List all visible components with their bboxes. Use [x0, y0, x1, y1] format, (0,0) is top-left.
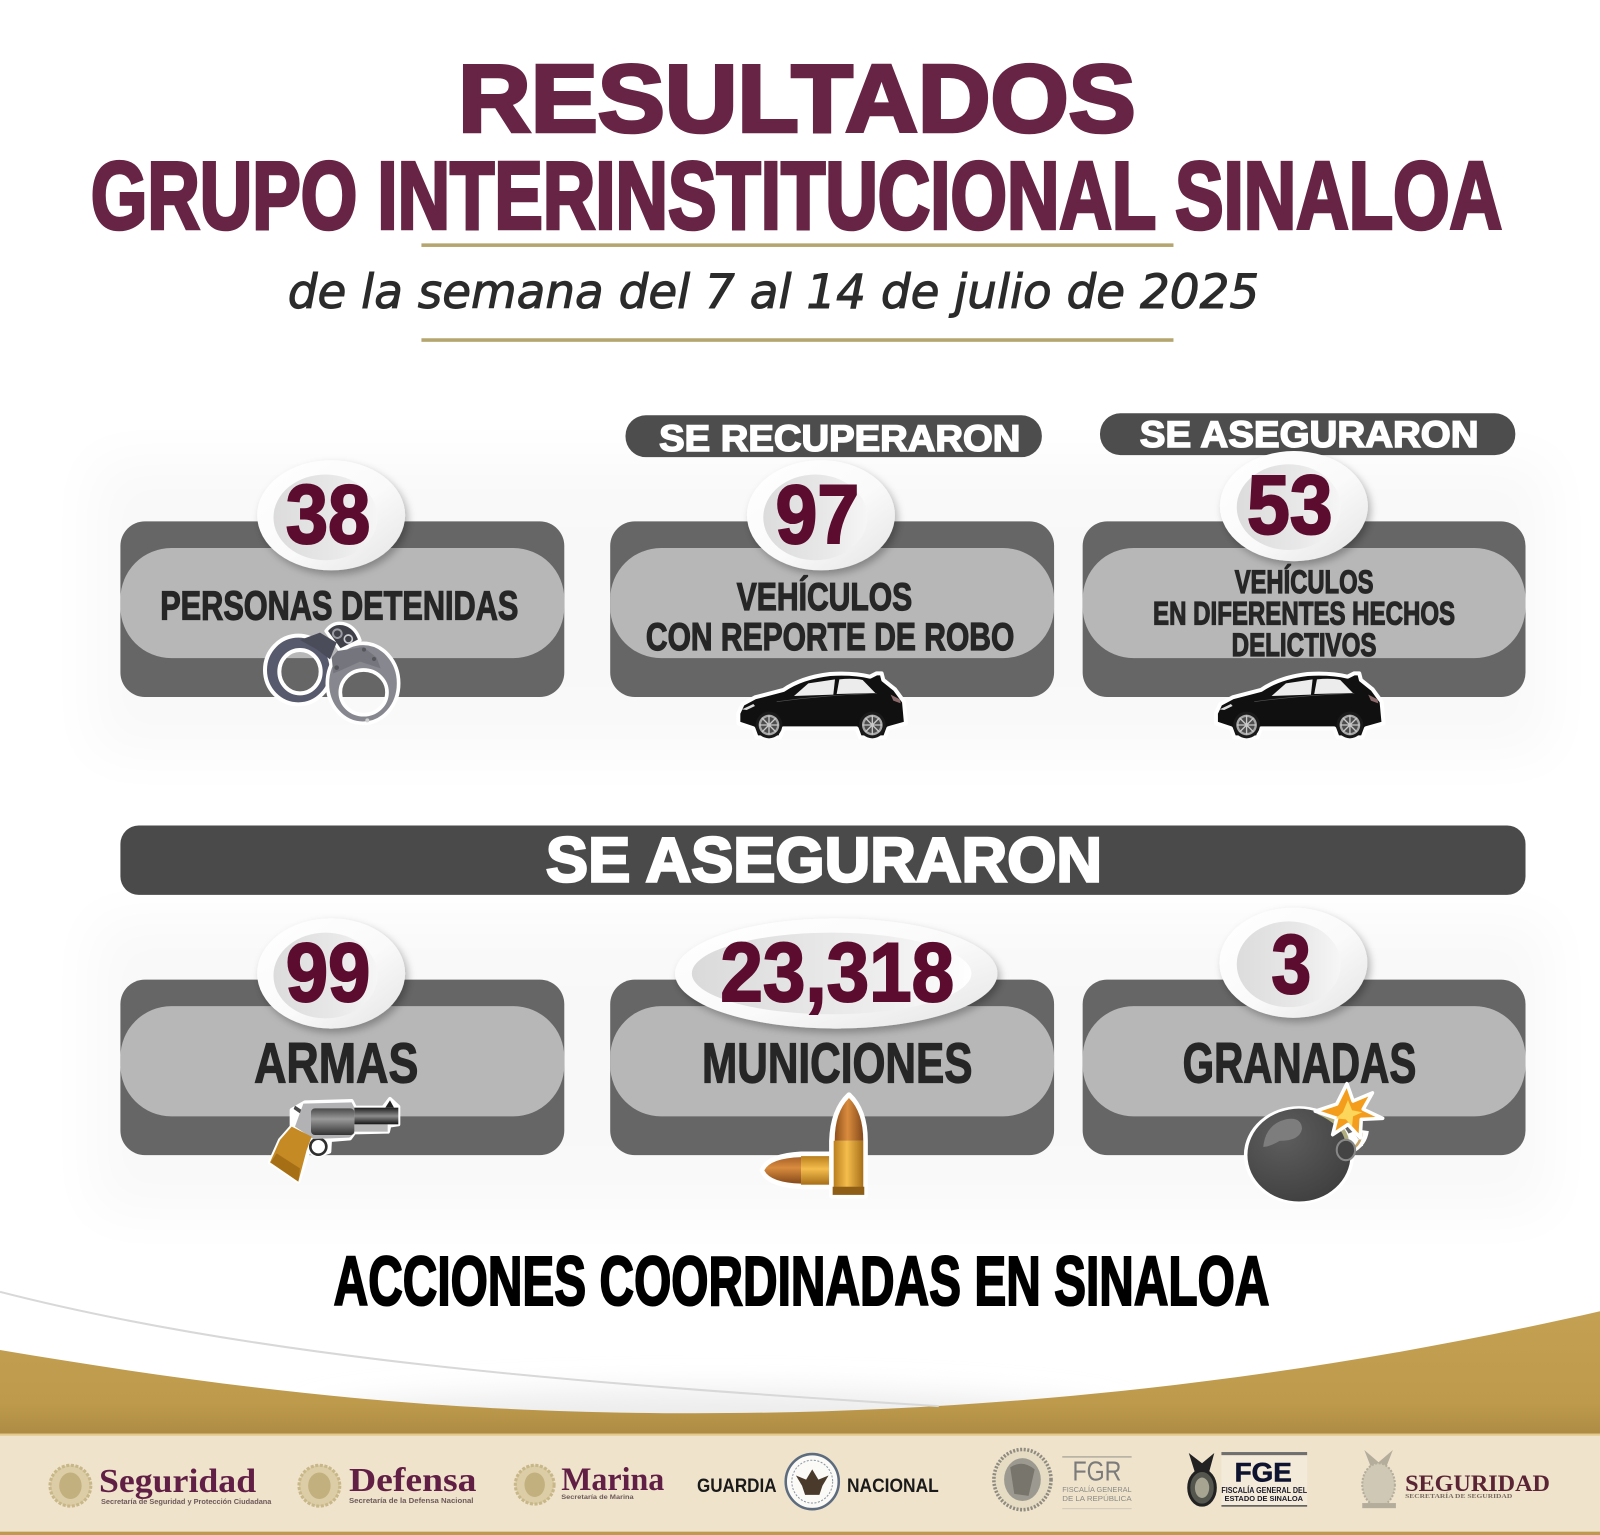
panel: granadas [1083, 908, 1526, 1204]
panel: armas [120, 918, 564, 1182]
badge: 97 [747, 460, 895, 570]
label: vehiculos: VEHÍCULOS [737, 575, 912, 619]
heading bar: SE ASEGURARON [120, 826, 1526, 896]
badge: 3: 3 [1271, 917, 1311, 1011]
logo: Seguridad: Seguridad [99, 1463, 256, 1500]
panel: vehiculos con reporte de robo [610, 460, 1054, 738]
label: personas detenidas: PERSONAS DETENIDAS [160, 582, 518, 628]
emblem [1362, 1450, 1396, 1508]
panel: vehiculos en diferentes hechos delictivos [1083, 451, 1526, 738]
label: delictivos: DELICTIVOS [1232, 626, 1377, 663]
icon: car [738, 673, 906, 738]
logo: Seguridad Sinaloa: SEGURIDAD [1405, 1471, 1550, 1497]
logo: Guardia Nacional: NACIONAL [847, 1475, 939, 1497]
footer wave: gold [0, 1292, 1600, 1451]
icon: bomb [1244, 1084, 1383, 1204]
label: en diferentes hechos: EN DIFERENTES HECHOS [1153, 594, 1455, 631]
badge: 53 [1220, 451, 1368, 561]
logo: FGR: FISCALÍA GENERAL [1062, 1485, 1132, 1494]
heading pill: SE ASEGURARON small: SE ASEGURARON [1140, 414, 1479, 455]
logo: FGE: FGE [1235, 1458, 1292, 1488]
logo: Defensa: Secretaría de la Defensa Nacional [349, 1497, 473, 1505]
badge: 97: 97 [776, 467, 859, 561]
emblem [994, 1449, 1051, 1510]
logo: Marina: Marina [561, 1462, 664, 1498]
logo: Guardia Nacional [697, 1454, 939, 1509]
footer band [0, 1434, 1600, 1532]
heading pill: SE RECUPERARON: SE RECUPERARON [659, 418, 1020, 459]
label: vehiculos: VEHÍCULOS [1235, 563, 1373, 600]
heading bar: SE ASEGURARON: SE ASEGURARON [546, 826, 1102, 896]
logo: FGE [1189, 1452, 1307, 1507]
icon: handcuffs [265, 623, 399, 723]
badge: 99: 99 [286, 925, 370, 1019]
title: RESULTADOS: RESULTADOS [458, 46, 1136, 153]
badge: 38 [257, 460, 405, 570]
subtitle with top and bottom rules: de la semana del 7 al 14 de julio de 2025 [288, 265, 1259, 320]
logo: Defensa [299, 1462, 477, 1506]
panel: municiones [610, 918, 1054, 1196]
badge: 99 [257, 918, 405, 1029]
badge: 53: 53 [1247, 458, 1333, 552]
label: municiones: MUNICIONES [702, 1032, 972, 1095]
emblem [50, 1465, 91, 1506]
badge: 23,318 [675, 918, 997, 1029]
label: granadas: GRANADAS [1183, 1032, 1416, 1095]
logo: Seguridad [50, 1463, 272, 1506]
logo: Seguridad Sinaloa: SECRETARÍA DE SEGURIDAD [1405, 1492, 1513, 1500]
badge: 38: 38 [286, 467, 370, 561]
icon: bullets [762, 1095, 865, 1196]
emblem [1189, 1453, 1215, 1505]
badge: 23,318: 23,318 [720, 925, 954, 1019]
logo: FGR [994, 1449, 1132, 1510]
logo: Defensa: Defensa [349, 1462, 477, 1499]
logo: Seguridad Sinaloa [1362, 1450, 1550, 1508]
logo: FGE: FISCALÍA GENERAL DEL [1221, 1485, 1307, 1495]
panel: personas detenidas [120, 460, 564, 723]
label: armas: ARMAS [254, 1032, 418, 1095]
logo: Marina [515, 1462, 664, 1504]
subtitle with top and bottom rules [288, 243, 1259, 342]
icon: car [1216, 673, 1384, 738]
emblem [786, 1454, 839, 1509]
logo: Marina: Secretaría de Marina [561, 1494, 634, 1501]
logo: Seguridad: Secretaría de Seguridad y Protección Ciudadana [101, 1498, 272, 1506]
logo: Guardia Nacional: GUARDIA [697, 1475, 777, 1497]
emblem [299, 1465, 340, 1506]
logo: FGE: ESTADO DE SINALOA [1224, 1494, 1304, 1503]
logo: FGR: DE LA REPÚBLICA [1062, 1494, 1132, 1503]
label: con reporte de robo: CON REPORTE DE ROBO [646, 616, 1014, 659]
logo: FGR: FGR [1072, 1456, 1121, 1487]
badge: 3 [1219, 908, 1367, 1018]
icon: revolver [270, 1099, 398, 1182]
emblem [515, 1465, 554, 1504]
